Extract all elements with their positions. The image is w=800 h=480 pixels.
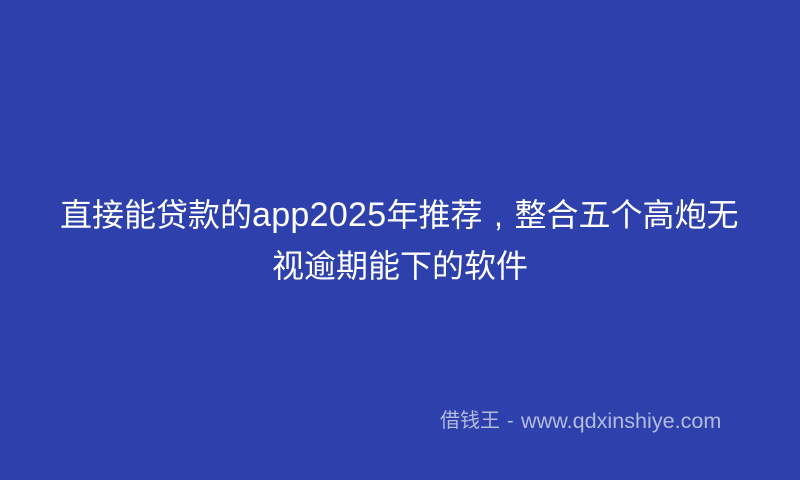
title line 1: , <box>494 197 503 233</box>
title line 2: 视逾期能下的软件 <box>272 248 528 284</box>
title <box>60 196 739 284</box>
watermark: www.qdxinshiye.com <box>521 408 721 433</box>
title line 1: 直接能贷款的app2025年推荐 整合五个高炮无 <box>60 196 739 234</box>
watermark: - <box>507 410 514 432</box>
watermark: 借钱王 <box>440 410 500 432</box>
